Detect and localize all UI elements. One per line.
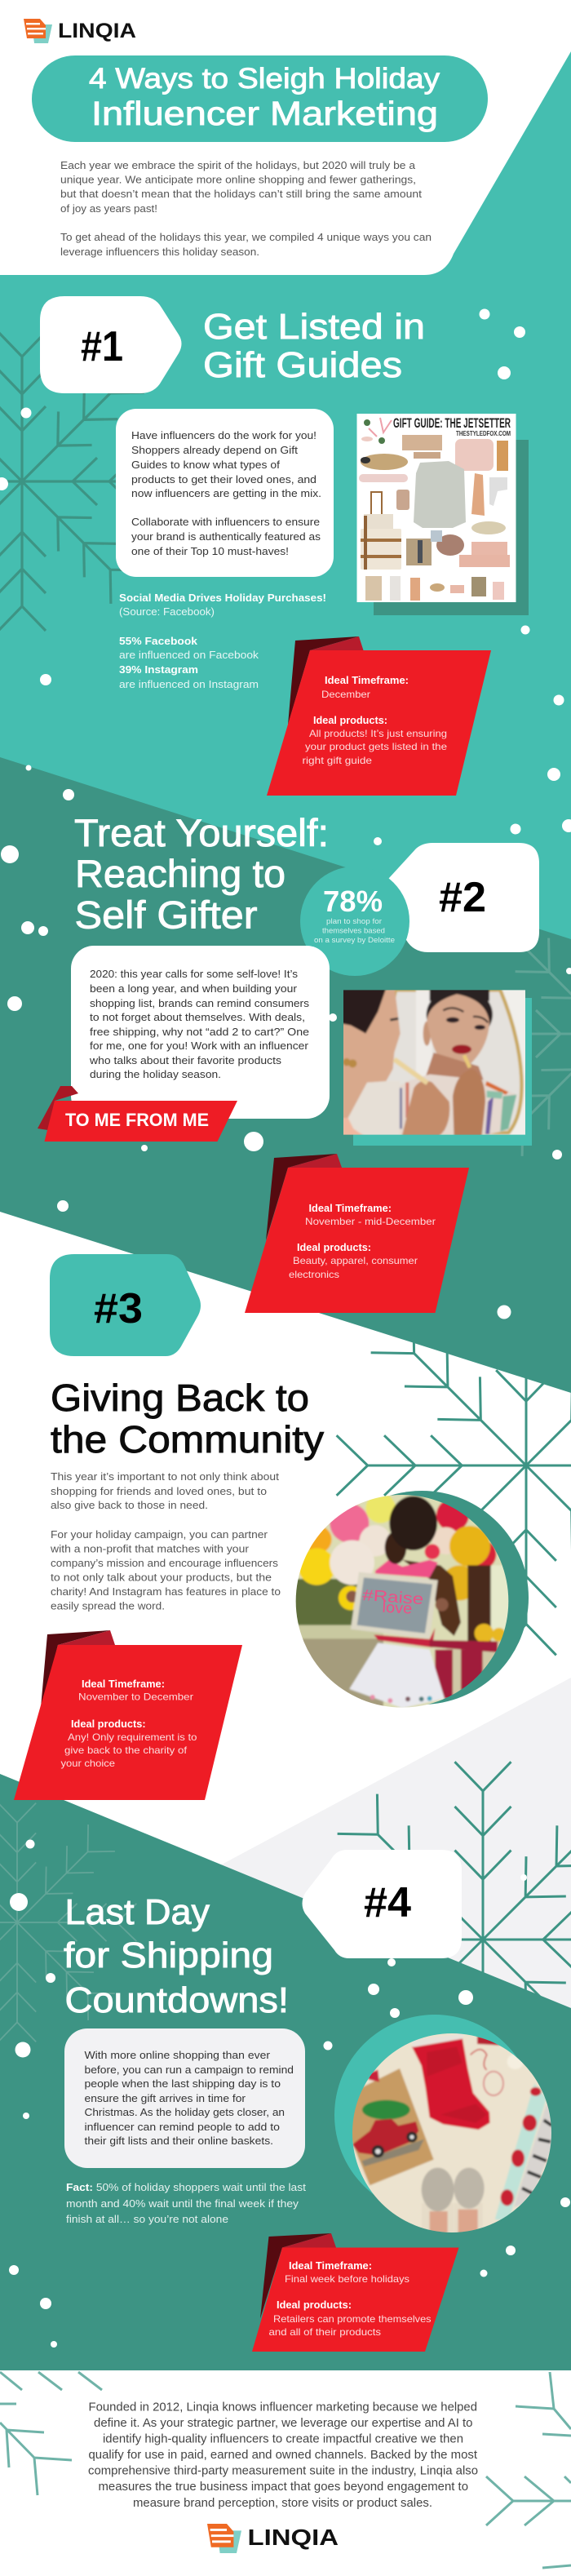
heading: section 4: Countdowns!	[65, 1980, 289, 2020]
stats: social media: are influenced on Facebook	[119, 649, 259, 661]
footer text: qualify for use in paid, earned and owned channels. Backed by the most	[88, 2448, 478, 2462]
stat circle: 78%: on a survey by Deloitte	[314, 936, 395, 945]
image: holiday flat lay	[352, 2033, 551, 2232]
ribbon card: section 3: give back to the charity of	[64, 1745, 188, 1756]
title pill	[32, 55, 488, 142]
text box: section 1	[116, 409, 334, 577]
heading: section 4	[64, 1892, 289, 2020]
circle backing: photo 3	[315, 1491, 529, 1705]
intro text: but that doesn’t mean that the holidays can’t still bring the same amount	[60, 188, 422, 200]
text box: section 4: people when the last shipping day is to	[85, 2077, 281, 2090]
stats: social media: Social Media Drives Holiday Purchases!	[119, 592, 326, 604]
text box: section 2: free shipping, why not “add 2 to cart?” One	[90, 1026, 309, 1038]
ribbon card: section 4: Ideal Timeframe:	[289, 2260, 372, 2272]
footer text: Founded in 2012, Linqia knows influencer marketing because we helped	[88, 2401, 477, 2414]
ribbon card: section 2: electronics	[289, 1269, 339, 1280]
tag: #3	[50, 1254, 201, 1356]
ribbon card: section 3: your choice	[60, 1758, 115, 1769]
footer text: define it. As your strategic partner, we leverage our expertise and AI to	[94, 2416, 473, 2430]
heading: section 2	[74, 811, 329, 937]
ribbon card: section 2: Ideal products:	[297, 1242, 371, 1253]
image: girl with chalkboard: #Raise	[362, 1587, 424, 1608]
body text: section 3: charity! And Instagram has features in place to	[51, 1585, 281, 1598]
text box: section 4: their gift lists and their online baskets.	[85, 2135, 273, 2147]
stats: social media: (Source: Facebook)	[119, 605, 215, 618]
tag: #4: #4	[364, 1879, 411, 1926]
text box: section 4: With more online shopping than ever	[85, 2049, 271, 2061]
ribbon card: section 4: Final week before holidays	[285, 2273, 409, 2285]
ribbon card: section 3: Any! Only requirement is to	[68, 1731, 197, 1743]
text box: section 4: ensure the gift arrives in time for	[85, 2092, 246, 2104]
heading: section 2: Treat Yourself:	[74, 811, 329, 854]
ribbon card: section 3: Ideal products:	[71, 1718, 146, 1730]
body text: section 3: with a non-profit that matches with your	[50, 1542, 250, 1555]
snowflake: section 2 faint	[516, 938, 571, 1156]
tag: #1: #1	[81, 323, 123, 370]
intro text: of joy as years past!	[60, 202, 157, 215]
ribbon card: section 1: All products! It’s just ensuring	[309, 728, 447, 739]
text box: section 1: Collaborate with influencers to ensure	[131, 516, 320, 528]
footer text: comprehensive third-party measurement suite in the industry, Linqia also	[88, 2464, 478, 2478]
section background: teal	[0, 51, 571, 941]
heading: section 3: Giving Back to	[51, 1377, 309, 1419]
tag: #2: #2	[439, 874, 486, 921]
snowflake: section 1	[0, 332, 171, 631]
stat circle: 78%: 78%	[323, 885, 383, 918]
body text: section 3	[50, 1470, 281, 1612]
image: gift guide collage	[357, 414, 516, 602]
ribbon card: section 4	[252, 2233, 458, 2352]
text box: section 2: 2020: this year calls for some self-love! It’s	[90, 968, 299, 980]
snowflake: section 4	[305, 1762, 571, 2117]
stats: social media	[119, 592, 326, 690]
title pill: Influencer Marketing	[91, 95, 438, 132]
heading: section 4: Last Day	[65, 1892, 210, 1932]
section background: light grey wedge	[196, 1678, 571, 2015]
section background: section 2 green band	[0, 757, 571, 1393]
circle backing: photo 4	[334, 2015, 535, 2215]
fact text: month and 40% wait until the final week if they	[66, 2197, 299, 2210]
text box: section 4: influencer can remind people to add to	[85, 2121, 280, 2133]
footer text: measures the true business impact that goes beyond engagement to	[98, 2480, 468, 2494]
body text: section 3: to not only talk about your products, but the	[51, 1572, 272, 1583]
section background: section 4 green band	[0, 1774, 571, 2370]
heading: section 3: the Community	[51, 1418, 324, 1461]
fact text	[66, 2181, 306, 2225]
footer text	[88, 2401, 478, 2510]
fact text: finish at all… so you’re not alone	[66, 2213, 228, 2225]
body text: section 3: This year it’s important to not only think about	[51, 1470, 279, 1483]
snow dots	[0, 308, 571, 2348]
image: lipstick photo	[343, 990, 525, 1135]
text box: section 2: to not forget about themselves. With deals,	[90, 1011, 305, 1023]
tag: #4	[302, 1850, 462, 1958]
text box: section 1: Guides to know what types of	[131, 459, 280, 471]
title pill: 4 Ways to Sleigh Holiday	[89, 63, 440, 95]
intro text: leverage influencers this holiday season.	[60, 246, 259, 258]
body text: section 3: company’s mission and encourage influencers	[51, 1557, 279, 1569]
heading: section 2: Self Gifter	[75, 893, 258, 937]
stat circle: 78%: themselves based	[322, 927, 385, 936]
heading: section 3	[51, 1377, 324, 1461]
image: girl with chalkboard	[295, 1495, 509, 1708]
stats: social media: are influenced on Instagram	[119, 678, 259, 690]
heading: section 1	[203, 307, 425, 385]
ribbon card: section 1: Ideal products:	[313, 715, 387, 726]
body text: section 3: For your holiday campaign, you can partner	[51, 1528, 268, 1541]
ribbon card: section 2: Beauty, apparel, consumer	[293, 1255, 418, 1266]
logo: footer: LINQIA	[248, 2525, 339, 2550]
image shadow: gift guide	[374, 440, 529, 615]
text box: section 1: Shoppers already depend on Gift	[131, 444, 298, 456]
ribbon card: section 1	[267, 636, 491, 796]
intro text: Each year we embrace the spirit of the holidays, but 2020 will truly be a	[60, 159, 416, 171]
body text: section 3: shopping for friends and loved ones, but to	[51, 1485, 267, 1497]
banner: to me from me	[38, 1086, 237, 1142]
footer text: identify high-quality influencers to create impactful creative we then	[103, 2432, 463, 2446]
tag: #1	[40, 296, 181, 393]
ribbon card: section 1: December	[321, 689, 370, 700]
stat circle: 78%	[300, 867, 409, 976]
intro text: unique year. We anticipate more online shopping and fewer gatherings,	[60, 173, 416, 186]
image: girl with chalkboard: love	[382, 1598, 413, 1617]
body text: section 3: easily spread the word.	[51, 1599, 165, 1612]
text box: section 1: now influencers are getting in the mix.	[131, 487, 321, 499]
ribbon card: section 2: November - mid-December	[305, 1216, 436, 1227]
text box: section 2: shopping list, brands can remind consumers	[90, 997, 310, 1009]
ribbon card: section 4: and all of their products	[269, 2326, 381, 2338]
banner: to me from me: TO ME FROM ME	[65, 1110, 209, 1130]
ribbon card: section 4: Retailers can promote themselves	[273, 2313, 432, 2325]
ribbon card: section 1: your product gets listed in the	[305, 741, 447, 752]
ribbon card: section 3: Ideal Timeframe:	[82, 1678, 165, 1690]
stats: social media: 39% Instagram	[119, 663, 198, 676]
ribbon card: section 1: Ideal Timeframe:	[325, 675, 409, 686]
ribbon card: section 1: right gift guide	[302, 755, 372, 766]
ribbon card: section 2	[245, 1154, 469, 1313]
text box: section 1: Have influencers do the work for you!	[131, 429, 316, 441]
ribbon card: section 4: Ideal products:	[277, 2299, 352, 2311]
image shadow: lipstick photo	[353, 998, 532, 1146]
image: gift guide collage: THESTYLEDFOX.COM	[456, 430, 511, 437]
ribbon card: section 3	[14, 1630, 242, 1800]
text box: section 1: one of their Top 10 must-haves!	[131, 545, 289, 557]
snowflake: section 3	[337, 1276, 571, 1655]
ribbon card: section 3: November to December	[78, 1691, 193, 1703]
footer text: measure brand perception, store visits or product sales.	[133, 2496, 432, 2510]
ribbon card: section 2: Ideal Timeframe:	[308, 1203, 392, 1214]
heading: section 1: Get Listed in	[203, 307, 425, 347]
stats: social media: 55% Facebook	[119, 635, 198, 647]
text box: section 1: your brand is authentically featured as	[131, 530, 321, 543]
text box: section 4: Christmas. As the holiday gets closer, an	[85, 2106, 285, 2118]
snowflake: footer left	[0, 2372, 102, 2495]
tag: #3: #3	[94, 1285, 143, 1332]
text box: section 2: for me, one for you! Work with an influencer	[90, 1040, 309, 1052]
stat circle: 78%: plan to shop for	[326, 917, 382, 926]
snowflake: footer right	[486, 2372, 571, 2568]
body text: section 3: also give back to those in need.	[51, 1499, 208, 1511]
logo: footer	[207, 2524, 339, 2553]
text box: section 4	[64, 2028, 305, 2168]
intro text	[60, 159, 432, 258]
text box: section 2	[71, 946, 330, 1119]
tag: #2	[371, 843, 539, 952]
logo: header	[24, 19, 136, 43]
fact text: Fact: 50% of holiday shoppers wait until the last	[66, 2181, 306, 2193]
snowflake: section 4 faint	[0, 1803, 136, 2042]
intro text: To get ahead of the holidays this year, we compiled 4 unique ways you can	[60, 231, 432, 243]
text box: section 2: been a long year, and when building your	[90, 982, 298, 995]
text box: section 1: products to get their loved ones, and	[131, 473, 316, 485]
logo: header: LINQIA	[58, 20, 136, 42]
heading: section 1: Gift Guides	[203, 345, 402, 385]
text box: section 4: before, you can run a campaign to remind	[85, 2064, 294, 2076]
heading: section 4: for Shipping	[64, 1935, 273, 1975]
heading: section 2: Reaching to	[75, 852, 286, 895]
text box: section 2: during the holiday season.	[90, 1068, 221, 1080]
text box: section 2: who talks about their favorite products	[89, 1054, 282, 1066]
